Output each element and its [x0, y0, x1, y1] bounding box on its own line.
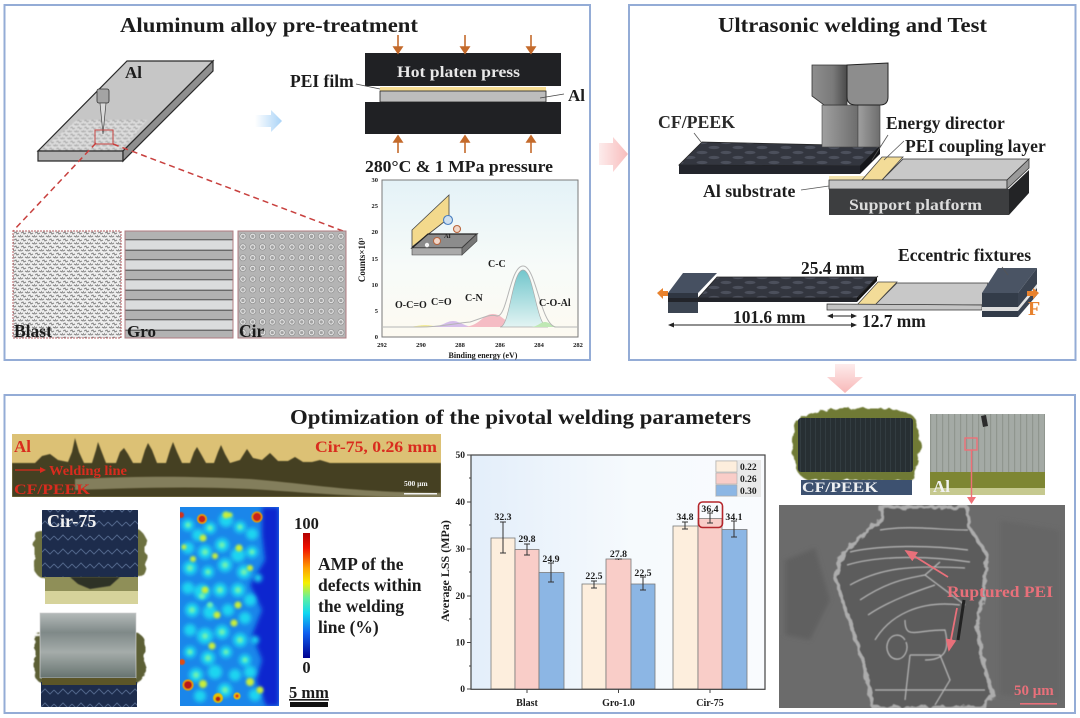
x tick labels: 286 [495, 342, 506, 349]
peak labels [395, 259, 571, 311]
y tick labels: 0 [375, 334, 378, 341]
label: F: F [1028, 298, 1040, 320]
sample: blast texture [13, 231, 121, 341]
diagram: lap shear test fixture [657, 245, 1040, 331]
axes [471, 455, 765, 689]
heatmap cyan blobs [182, 513, 262, 702]
x tick labels: 282 [573, 342, 583, 349]
y tick labels: 50 [456, 451, 465, 461]
y tick labels: 10 [372, 282, 378, 289]
y tick marks [467, 455, 710, 693]
category labels [516, 698, 724, 709]
heatmap hot spots [178, 512, 262, 703]
highlight: best value [698, 502, 722, 528]
fracture ridges [847, 528, 985, 705]
label: Al: Al [14, 437, 31, 456]
label: PEI film: PEI film [290, 71, 354, 91]
category labels: Gro-1.0 [602, 698, 635, 709]
sample: groove texture [125, 231, 233, 341]
chart: XPS spectrum [357, 177, 583, 360]
label: CF/PEEK: CF/PEEK [802, 480, 878, 496]
chart: average LSS bar chart [438, 451, 765, 709]
label: eccentric fixtures: Eccentric fixtures [898, 245, 1031, 265]
bars: Cir-75 [673, 518, 747, 690]
micrograph: welding line cross-section [12, 434, 441, 498]
peak: C-O-Al [530, 322, 560, 327]
label: PEI coupling layer: PEI coupling layer [905, 136, 1046, 156]
force arrows [657, 288, 1039, 299]
scale bar: 50 um: 50 μm [1014, 683, 1054, 699]
label: CF/PEEK: CF/PEEK [658, 112, 735, 132]
y tick labels: 10 [456, 638, 465, 648]
photo: fractured CF/PEEK side [792, 408, 921, 496]
value labels: 34.8 [676, 512, 694, 523]
legend: 0.26 [740, 475, 757, 485]
icon: aluminum plate with blasting nozzle [38, 61, 213, 161]
scale bar: 500 um [404, 481, 437, 494]
value labels: 22.5 [585, 571, 603, 582]
dimension: 12.7 mm [828, 311, 926, 331]
selection box and arrow [965, 438, 977, 498]
category labels: Cir-75 [696, 698, 724, 709]
value labels: 27.8 [610, 549, 627, 560]
label: 0: 0 [302, 658, 311, 677]
pressure arrows [394, 35, 535, 153]
y axis title: Counts×10³ [357, 238, 367, 282]
label: energy director: Energy director [886, 113, 1005, 133]
x tick labels [377, 342, 583, 349]
zoom lines [13, 143, 343, 231]
photo: fractured aluminum side [930, 414, 1045, 504]
label: AMP caption: defects within [318, 575, 422, 595]
label: Cir-75: Cir-75 [47, 511, 96, 531]
photo: Cir-75 CF/PEEK side [34, 510, 146, 604]
y tick labels: 20 [372, 229, 378, 236]
peak labels: C=O [431, 297, 452, 308]
x tick labels: 288 [455, 342, 466, 349]
arrow: blue process arrow [255, 110, 282, 132]
heatmap warm blobs [182, 512, 264, 694]
y tick labels: 30 [456, 545, 465, 555]
scale bar: 5 mm: 5 mm [289, 683, 329, 702]
panel: optimization of welding parameters [4, 395, 1075, 713]
heading: optimization: Optimization of the pivotal welding parameters [290, 405, 751, 429]
y tick labels: 5 [375, 308, 379, 315]
y tick labels: 15 [372, 256, 379, 263]
peak labels: O-C=O [395, 300, 427, 311]
label: Cir: Cir [239, 321, 264, 341]
peak labels: C-C [488, 259, 506, 270]
y tick labels: 20 [456, 592, 465, 602]
panel: aluminum alloy pre-treatment [4, 5, 590, 360]
value labels: 24.9 [542, 554, 560, 565]
label: support platform: Support platform [849, 197, 982, 214]
label: Blast: Blast [14, 321, 52, 341]
bars: Blast [491, 538, 564, 690]
value labels: 22.5 [634, 568, 652, 579]
category labels: Blast [516, 698, 539, 709]
diagram: ultrasonic welding setup [658, 63, 1046, 215]
annotation: ruptured PEI: Ruptured PEI [947, 584, 1053, 601]
scale bar: 500 um: 500 μm [404, 479, 428, 488]
image: SEM fracture surface [779, 505, 1065, 708]
label: AMP caption [318, 554, 422, 637]
label: AMP caption: AMP of the [318, 554, 404, 574]
dimension: 101.6 mm: 101.6 mm [733, 307, 806, 327]
label: CF/PEEK: CF/PEEK [14, 482, 90, 498]
x tick labels: 292 [377, 342, 387, 349]
peak: C=O [430, 321, 476, 327]
arrow: pink process arrow [599, 137, 628, 172]
label: welding line [15, 466, 127, 478]
y tick labels [456, 451, 465, 695]
label: Al substrate: Al substrate [703, 181, 795, 201]
x tick labels: 290 [416, 342, 426, 349]
legend: 0.30 [740, 487, 757, 497]
dimension: 25.4 mm [801, 258, 878, 298]
value labels: 32.3 [494, 512, 512, 523]
envelope line [383, 266, 578, 327]
x tick labels: 284 [534, 342, 545, 349]
photo: Cir-75 aluminum side [34, 613, 145, 707]
label: process conditions: 280°C & 1 MPa pressure [365, 157, 553, 176]
bars: Gro-1.0 [582, 559, 655, 689]
sample: circle texture [238, 231, 346, 341]
dimension: 25.4 mm: 25.4 mm [801, 258, 865, 278]
y tick labels: 40 [456, 498, 465, 508]
y tick labels [372, 177, 379, 341]
heatmap low band [250, 507, 279, 706]
peak: C-C [500, 270, 548, 327]
inset: PEI film on textured aluminum: Al [444, 233, 451, 240]
label: 100: 100 [294, 514, 319, 533]
x axis title: Binding energy (eV) [449, 351, 518, 360]
inset: PEI film on textured aluminum [412, 195, 477, 255]
legend: 0.22 [740, 463, 757, 473]
label: Gro: Gro [127, 322, 156, 341]
legend: amplitude colorbar [294, 514, 422, 677]
label: Al: Al [568, 86, 585, 105]
label: Cir-75, 0.26 mm: Cir-75, 0.26 mm [315, 439, 437, 456]
error bars [500, 513, 737, 590]
diagram: hot platen press [290, 35, 585, 176]
peak: C-N [462, 314, 524, 327]
label: AMP caption: line (%) [318, 617, 379, 637]
label: hot platen press: Hot platen press [397, 64, 520, 81]
heatmap mint centers [186, 522, 254, 693]
heading: ultrasonic welding: Ultrasonic welding and Test [718, 13, 987, 37]
value labels: 29.8 [518, 534, 536, 545]
value labels: 34.1 [725, 512, 743, 523]
heatmap: defect amplitude [178, 507, 279, 706]
y tick labels: 0 [460, 685, 465, 695]
label: Al: Al [125, 63, 142, 82]
y tick labels: 30 [372, 177, 378, 184]
y axis title: Average LSS (MPa) [438, 520, 452, 622]
peak labels: C-O-Al [539, 298, 571, 309]
annotation: ruptured PEI [906, 551, 1053, 650]
value labels: 36.4 [701, 504, 719, 515]
label: AMP caption: the welding [318, 596, 404, 616]
label: welding line: Welding line [49, 463, 127, 478]
peak labels: C-N [465, 293, 484, 304]
peak: O-C=O [405, 325, 445, 327]
legend [715, 460, 761, 497]
y tick labels: 25 [372, 203, 379, 210]
arrow: pink down arrow [827, 364, 863, 393]
panel: ultrasonic welding and test [629, 5, 1076, 360]
dimension: 12.7 mm: 12.7 mm [862, 311, 926, 331]
heading: pre-treatment: Aluminum alloy pre-treatment [120, 13, 418, 37]
scale bar: 50 um [1014, 686, 1057, 705]
label: Al: Al [933, 477, 950, 496]
value labels [494, 504, 743, 582]
